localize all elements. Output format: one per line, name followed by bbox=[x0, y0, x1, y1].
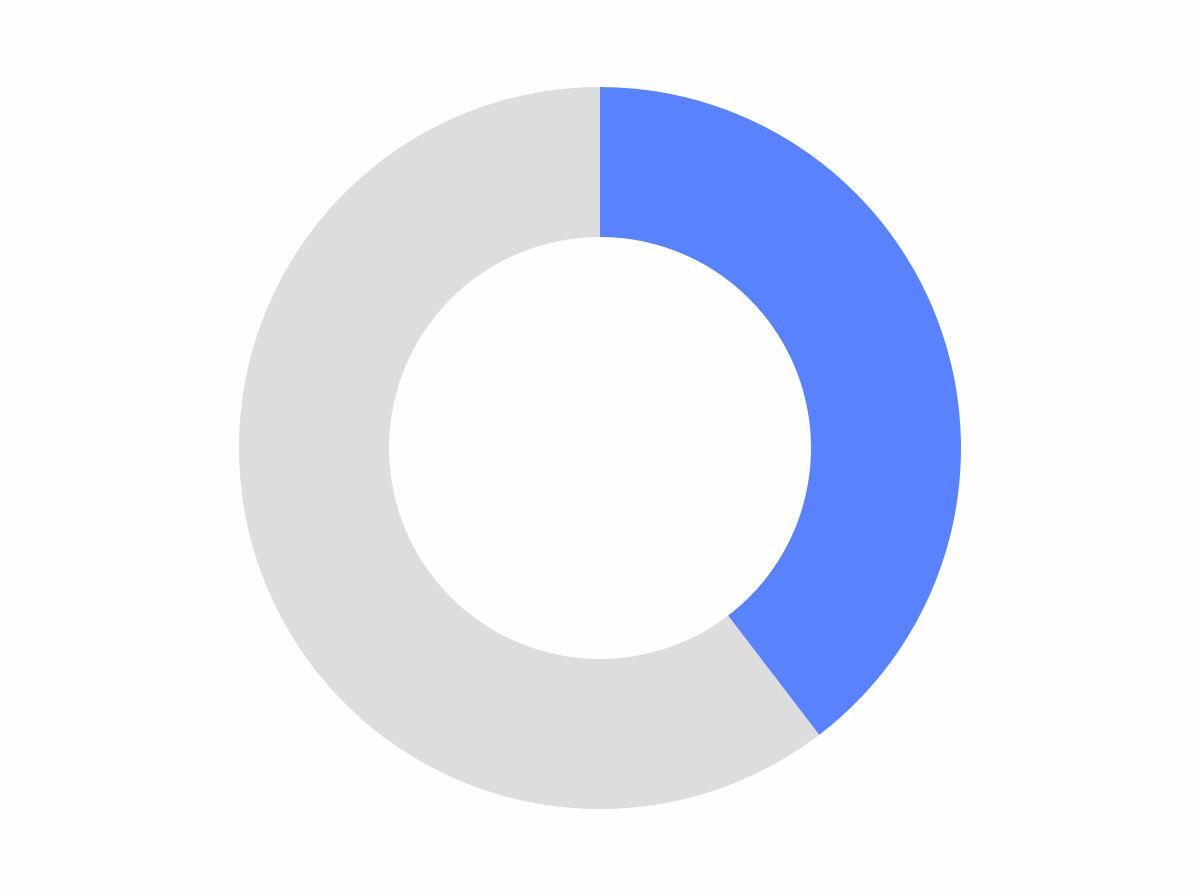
segment: blue share bbox=[600, 87, 961, 735]
segment: grey remainder bbox=[239, 87, 819, 809]
